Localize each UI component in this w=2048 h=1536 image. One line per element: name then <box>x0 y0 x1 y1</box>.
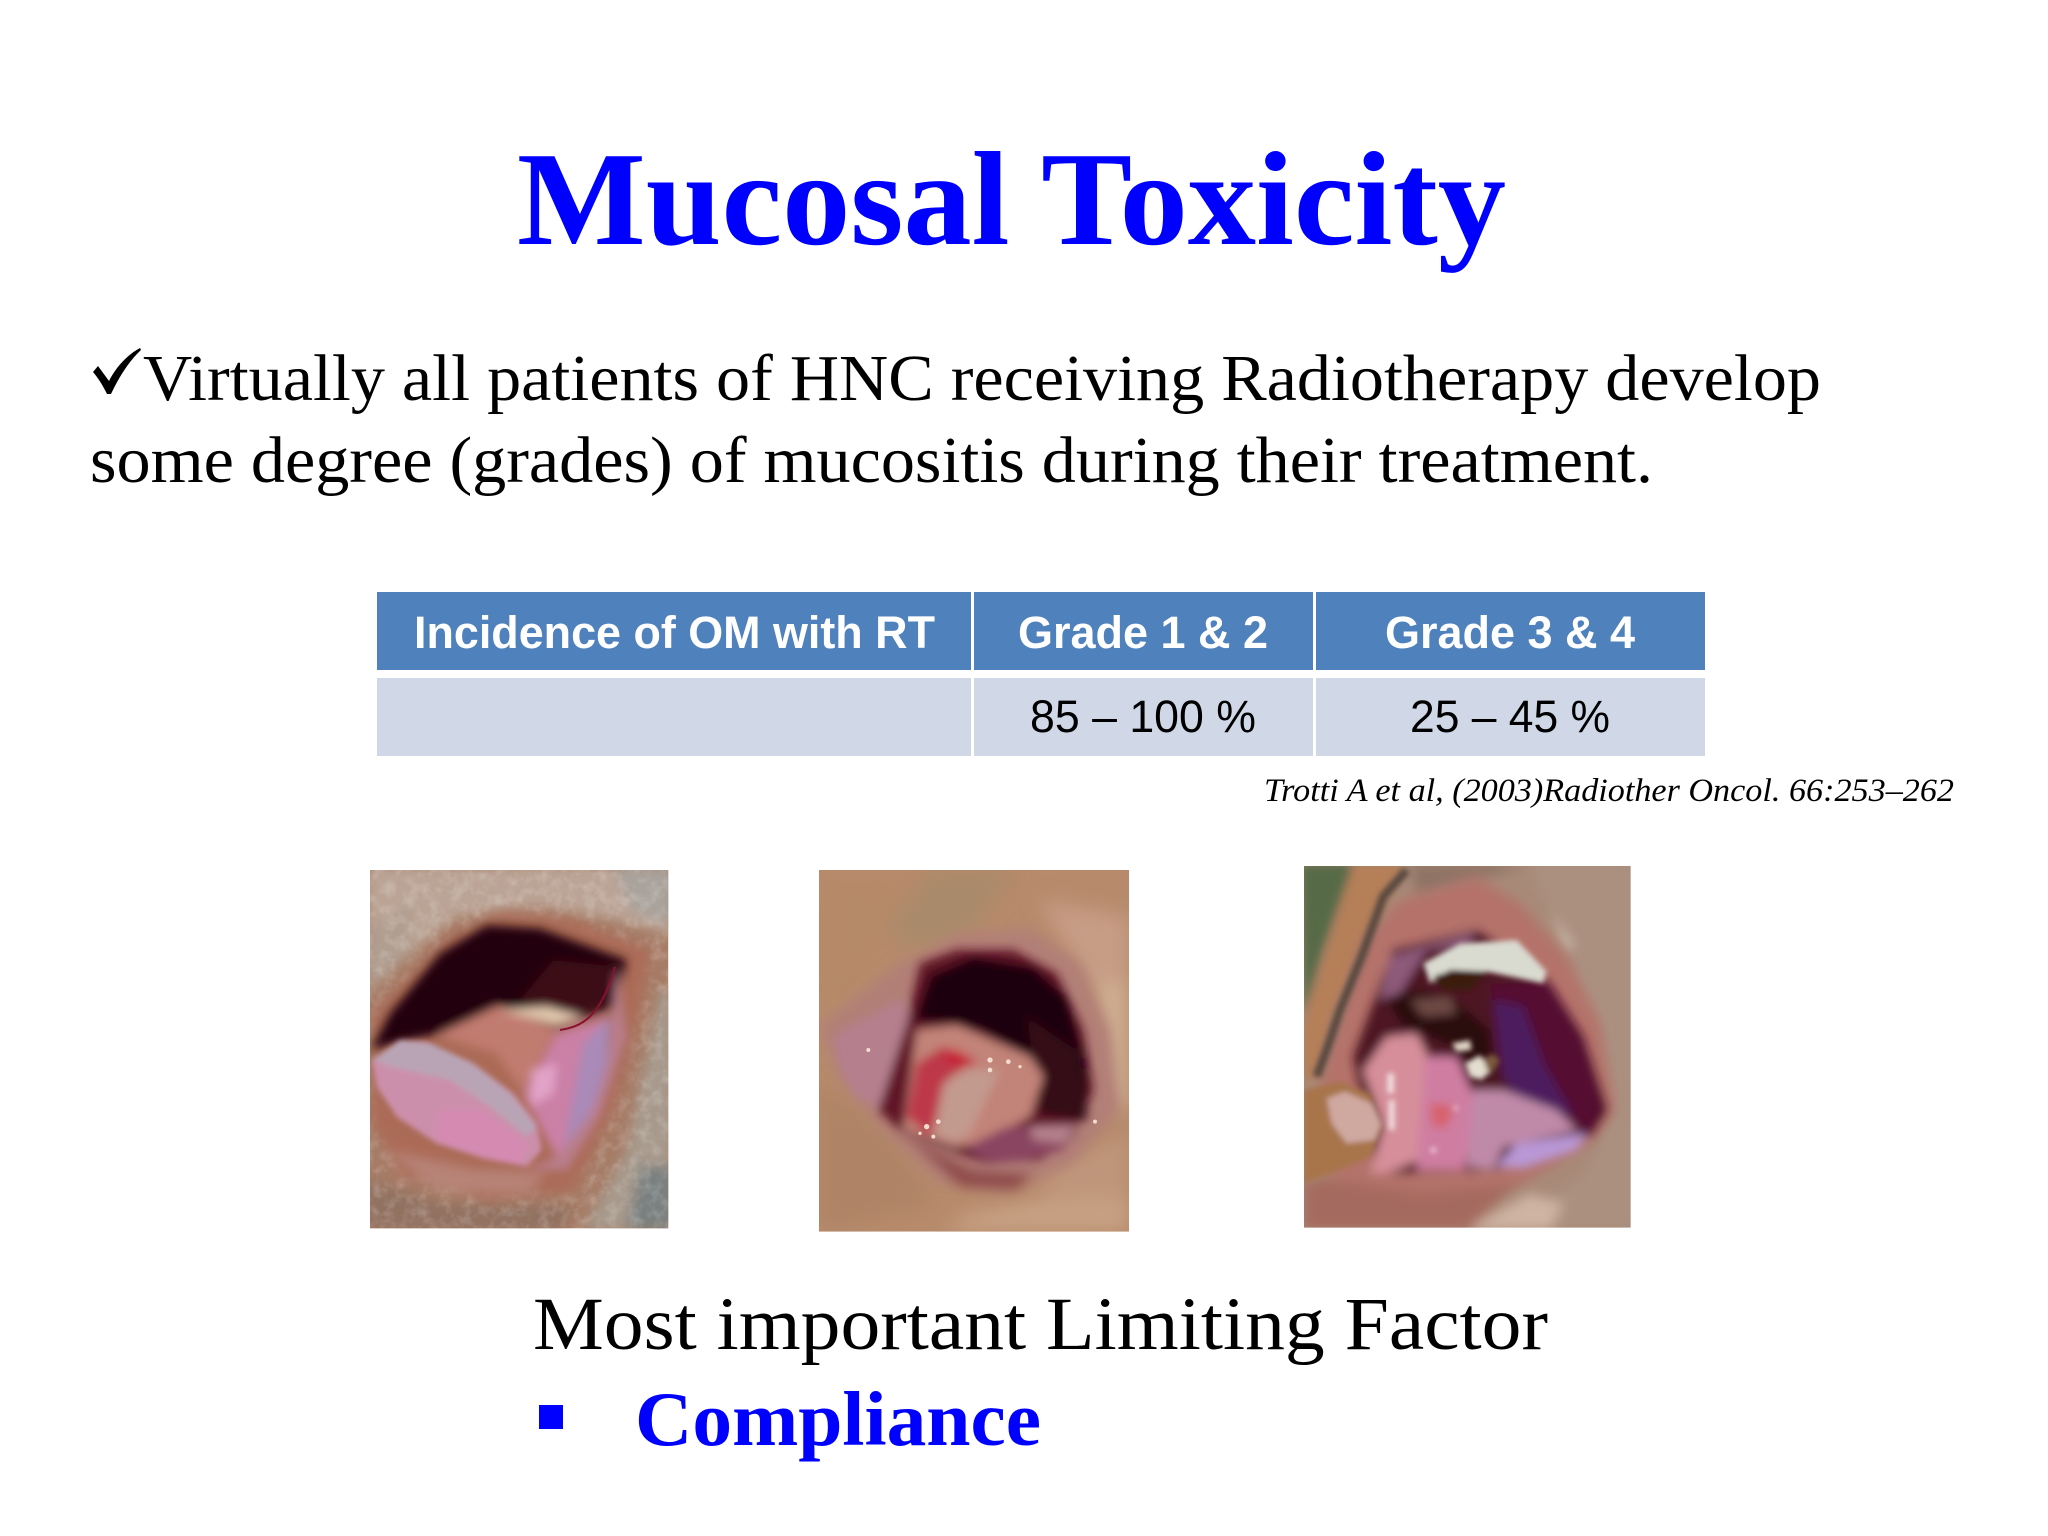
text line two: some degree (grades) of mucositis during their treatment. <box>90 424 1653 497</box>
icon: check mark <box>93 348 141 394</box>
header cell: grade 1 and 2 <box>974 592 1313 670</box>
text: compliance: Compliance <box>635 1376 1041 1462</box>
list item: compliance <box>539 1376 1041 1462</box>
photo: mucositis grade example one <box>367 867 673 1230</box>
body cell: 25 to 45 percent: 25 – 45 % <box>1410 691 1610 742</box>
citation: Trotti A et al, (2003)Radiother Oncol. 66:253–262 <box>1264 773 1954 809</box>
header cell: grade 1 and 2: Grade 1 & 2 <box>1018 607 1268 658</box>
header cell: incidence: Incidence of OM with RT <box>414 607 935 658</box>
table: incidence of OM with RT <box>377 592 1705 756</box>
title: Mucosal Toxicity <box>517 125 1506 273</box>
body cell: 25 to 45 percent <box>1316 678 1705 756</box>
header cell: grade 3 and 4 <box>1316 592 1705 670</box>
text line one: Virtually all patients of HNC receiving Radiotherapy develop <box>143 342 1821 415</box>
header cell: incidence <box>377 592 971 670</box>
photo: mucositis grade example two <box>819 870 1129 1232</box>
body cell: 85 to 100 percent: 85 – 100 % <box>1030 691 1256 742</box>
header cell: grade 3 and 4: Grade 3 & 4 <box>1385 607 1635 658</box>
body cell: 85 to 100 percent <box>974 678 1313 756</box>
text: most important limiting factor: Most important Limiting Factor <box>533 1283 1548 1366</box>
body cell: empty <box>377 678 971 756</box>
text block: key statement <box>90 342 1821 497</box>
photo: mucositis grade example three <box>1300 863 1633 1230</box>
icon: square bullet <box>539 1405 563 1429</box>
